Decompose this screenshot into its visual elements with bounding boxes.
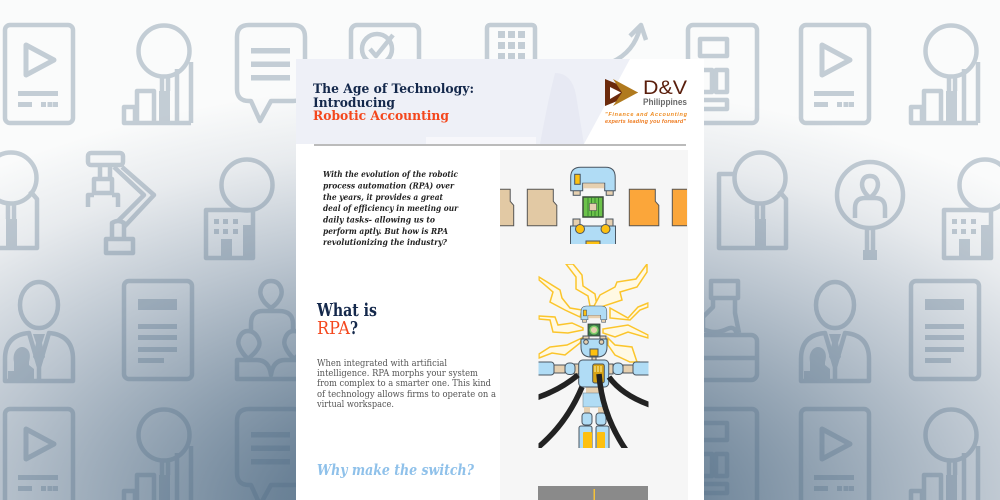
logo: D&V Philippines: experts leading you forward" <box>605 119 686 125</box>
icon: text document <box>124 281 192 379</box>
robot lower body <box>579 387 609 456</box>
icon: video document bottom <box>5 409 73 500</box>
intro text <box>323 170 459 248</box>
title: The Age of Technology: <box>313 82 474 97</box>
icon: video document right <box>801 25 869 123</box>
icon: growth arrow <box>612 25 646 62</box>
heading: What is RPA?: ? <box>350 318 358 339</box>
heading: What is RPA?: What is <box>316 300 377 321</box>
icon: magnifier building <box>206 160 272 260</box>
circuit chip <box>583 197 603 217</box>
lightning bolts <box>539 264 648 362</box>
header rule <box>314 144 686 146</box>
icon: calculator <box>688 25 757 123</box>
robot head <box>581 306 607 322</box>
icon: checklist document <box>351 25 419 123</box>
icon: magnifier building right <box>944 160 1000 260</box>
icon: magnifier person <box>837 162 903 260</box>
intro text: deal of efficiency in meeting our <box>323 204 458 214</box>
tan folders <box>500 188 558 226</box>
title: Robotic Accounting <box>313 109 449 124</box>
intro text: revolutionizing the industry? <box>323 238 448 248</box>
icon: grid document <box>487 25 535 123</box>
icon: group of people <box>237 281 305 379</box>
icon: magnifier chart bottom right <box>911 410 978 500</box>
heading: Why make the switch?: Why make the switch? <box>317 462 474 479</box>
icon: businessman <box>5 282 73 381</box>
intro text: the years, it provides a great <box>323 193 443 203</box>
glowing chip <box>588 324 600 336</box>
intro text: process automation (RPA) over <box>323 180 454 192</box>
icon: magnifier chart right <box>911 26 978 125</box>
logo: D&V Philippines: "Finance and Accounting <box>605 112 688 118</box>
orange folders <box>628 188 687 226</box>
robot torso <box>579 360 609 387</box>
title <box>313 82 474 124</box>
intro text: daily tasks- allowing us to <box>323 216 435 226</box>
heading: What is RPA?: RPA <box>317 318 351 339</box>
illustration: energized robot <box>538 264 648 448</box>
robot jaw <box>570 218 616 244</box>
logo: D&V Philippines: D&V <box>643 78 687 99</box>
icon: businessman right <box>801 282 869 381</box>
illustration: robot with folders <box>500 166 687 244</box>
header photo backdrop <box>296 59 630 144</box>
icon: stamp on desk <box>686 281 757 380</box>
RPA description: from complex to a smarter one. This kind <box>317 379 491 389</box>
intro text: With the evolution of the robotic <box>323 170 459 180</box>
logo: D&V Philippines: Philippines <box>643 97 687 107</box>
data cables <box>536 374 650 450</box>
icon: magnifier document left <box>0 152 37 250</box>
icon: speech bubble <box>237 25 305 121</box>
icon: magnifier document right <box>719 152 786 250</box>
RPA description <box>316 359 497 410</box>
RPA description: intelligence. RPA morphs your system <box>317 369 478 379</box>
icon: magnifier chart <box>124 26 191 125</box>
icon: video document <box>5 25 73 123</box>
robot head <box>571 167 615 195</box>
icon: magnifier chart bottom <box>124 410 191 500</box>
RPA description: virtual workspace. <box>316 400 394 410</box>
icon: speech bubble bottom <box>237 409 305 500</box>
title: Introducing <box>313 96 395 111</box>
robot arms <box>530 362 657 375</box>
heading: What is RPA? <box>316 300 377 339</box>
icon: robot arm <box>88 153 154 253</box>
intro text: perform aptly. But how is RPA <box>323 227 448 237</box>
icon: video document bottom right <box>801 409 869 500</box>
icon: text document right <box>911 281 979 379</box>
logo: D&V Philippines <box>605 78 688 125</box>
robot jaw <box>581 336 607 361</box>
road illustration <box>538 486 648 500</box>
panel: infographic page <box>296 59 704 500</box>
icon: calculator bottom <box>688 409 757 500</box>
right illustration column <box>500 150 688 500</box>
RPA description: When integrated with artificial <box>317 359 447 369</box>
RPA description: of technology allows firms to operate on a <box>317 390 497 400</box>
